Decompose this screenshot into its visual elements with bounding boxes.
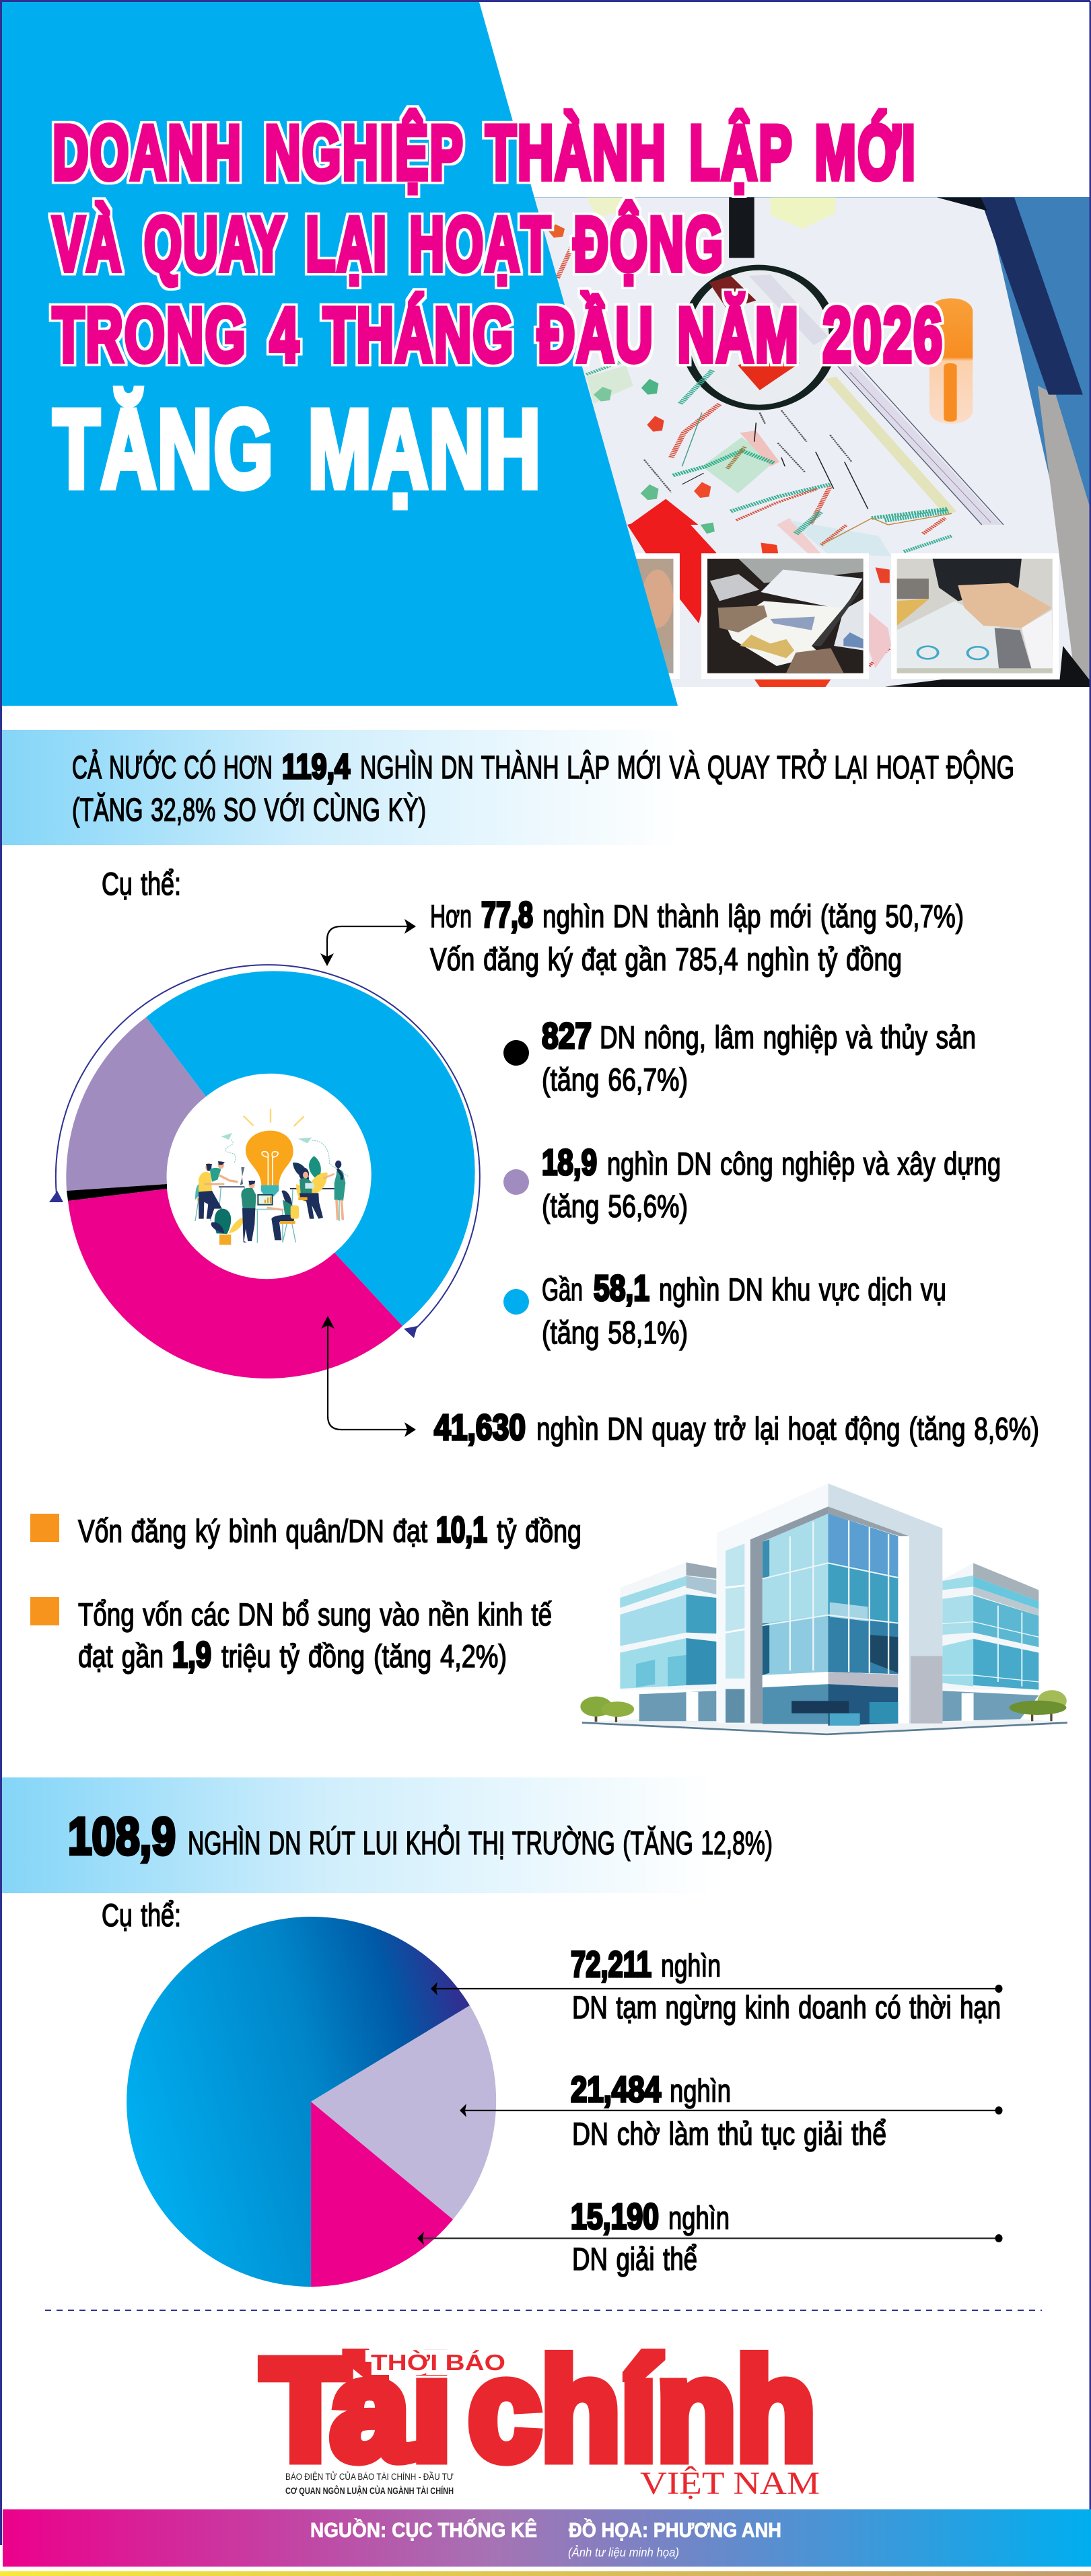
- label: cu the: Cụ thể:: [102, 866, 181, 901]
- newspaper logo: BÁO ĐIỆN TỬ CỦA BÁO TÀI CHÍNH - ĐẦU TƯ: [285, 2470, 454, 2482]
- callout: awaiting dissolution: nghìn: [670, 2073, 731, 2108]
- icon: office building: [580, 1483, 1067, 1735]
- footer credit bar: ĐỒ HỌA: PHƯƠNG ANH: [569, 2517, 781, 2542]
- callout: dissolved: DN giải thể: [572, 2241, 697, 2277]
- newspaper logo: chính: [468, 2330, 816, 2489]
- callout: new firms with arrow: [320, 895, 964, 977]
- newspaper logo: Tài: [262, 2330, 452, 2489]
- banner: new and returning firms: 119,4: [282, 747, 350, 786]
- label: cu the: Cụ thể:: [102, 1897, 181, 1933]
- legend: services: [503, 1268, 946, 1350]
- thumbnail 2: [701, 553, 869, 679]
- header photo: [534, 197, 1089, 687]
- callout: dissolved: nghìn: [668, 2200, 730, 2236]
- legend: services: 58,1: [594, 1268, 649, 1309]
- title: VÀ QUAY LẠI HOẠT ĐỘNG: [52, 202, 724, 287]
- capital facts: [30, 1510, 582, 1675]
- capital facts: 1,9: [172, 1635, 211, 1675]
- callout: awaiting dissolution: DN chờ làm thủ tục giải thể: [572, 2116, 886, 2151]
- newspaper logo: VIỆT NAM: [640, 2466, 820, 2501]
- legend: industry: [503, 1142, 1001, 1224]
- capital facts: 10,1: [436, 1510, 487, 1550]
- newspaper logo: THỜI BÁO: [371, 2350, 505, 2375]
- newspaper logo: CƠ QUAN NGÔN LUẬN CỦA NGÀNH TÀI CHÍNH: [285, 2485, 454, 2496]
- banner: firms exiting: [2, 1777, 773, 1893]
- banner: firms exiting: 108,9: [68, 1806, 176, 1866]
- legend: services: Gần: [542, 1272, 583, 1307]
- callout: new firms with arrow: Hơn: [430, 898, 472, 934]
- footer credit bar: [3, 2509, 1091, 2567]
- banner: new and returning firms: CẢ NƯỚC CÓ HƠN: [72, 749, 273, 786]
- title: TĂNG MẠNH: [53, 387, 542, 511]
- callout: dissolved: 15,190: [571, 2197, 659, 2237]
- newspaper logo: [262, 2330, 820, 2501]
- callout: returning firms with arrow: [321, 1316, 1039, 1448]
- callout: dissolved: [417, 2197, 1003, 2277]
- capital facts: triệu tỷ đồng (tăng 4,2%): [221, 1638, 507, 1674]
- pie chart: [127, 1917, 496, 2287]
- callout: temporary suspension: [431, 1944, 1003, 2025]
- legend: agriculture: DN nông, lâm nghiệp và thủy sản: [600, 1019, 976, 1055]
- banner: firms exiting: NGHÌN DN RÚT LUI KHỎI THỊ TRƯỜNG (TĂNG 12,8%): [188, 1825, 773, 1862]
- legend: agriculture: [503, 1016, 976, 1097]
- capital facts: Vốn đăng ký bình quân/DN đạt: [78, 1513, 427, 1549]
- banner: new and returning firms: (TĂNG 32,8% SO VỚI CÙNG KỲ): [72, 792, 426, 828]
- thumbnail 1: [635, 553, 680, 679]
- legend: services: (tăng 58,1%): [542, 1315, 688, 1350]
- thumbnail 3: [891, 553, 1059, 679]
- callout: temporary suspension: nghìn: [661, 1948, 721, 1983]
- callout: new firms with arrow: nghìn DN thành lập mới (tăng 50,7%): [542, 898, 964, 934]
- callout: new firms with arrow: 77,8: [481, 895, 533, 935]
- icon: team around light bulb: [195, 1109, 349, 1245]
- footer credit bar: (Ảnh tư liệu minh họa): [568, 2545, 679, 2559]
- callout: temporary suspension: 72,211: [571, 1944, 652, 1985]
- title: [52, 110, 944, 511]
- legend: agriculture: 827: [542, 1016, 592, 1056]
- blue header panel: [2, 2, 678, 706]
- legend: industry: (tăng 56,6%): [542, 1188, 688, 1224]
- capital facts: Tổng vốn các DN bổ sung vào nền kinh tế: [78, 1596, 552, 1632]
- legend: agriculture: (tăng 66,7%): [542, 1062, 688, 1097]
- legend: services: nghìn DN khu vực dịch vụ: [659, 1272, 946, 1307]
- banner: new and returning firms: [2, 730, 1014, 845]
- callout: awaiting dissolution: 21,484: [571, 2069, 661, 2110]
- donut chart: [66, 971, 475, 1378]
- footer credit bar: NGUỒN: CỤC THỐNG KÊ: [310, 2517, 537, 2542]
- callout: returning firms with arrow: 41,630: [434, 1407, 526, 1448]
- arc bracket around new firms: [49, 965, 480, 1338]
- capital facts: tỷ đồng: [497, 1513, 582, 1549]
- legend: industry: 18,9: [542, 1142, 597, 1183]
- callout: awaiting dissolution: [460, 2069, 1003, 2151]
- capital facts: đạt gần: [78, 1638, 164, 1674]
- callout: new firms with arrow: Vốn đăng ký đạt gần 785,4 nghìn tỷ đồng: [430, 941, 902, 977]
